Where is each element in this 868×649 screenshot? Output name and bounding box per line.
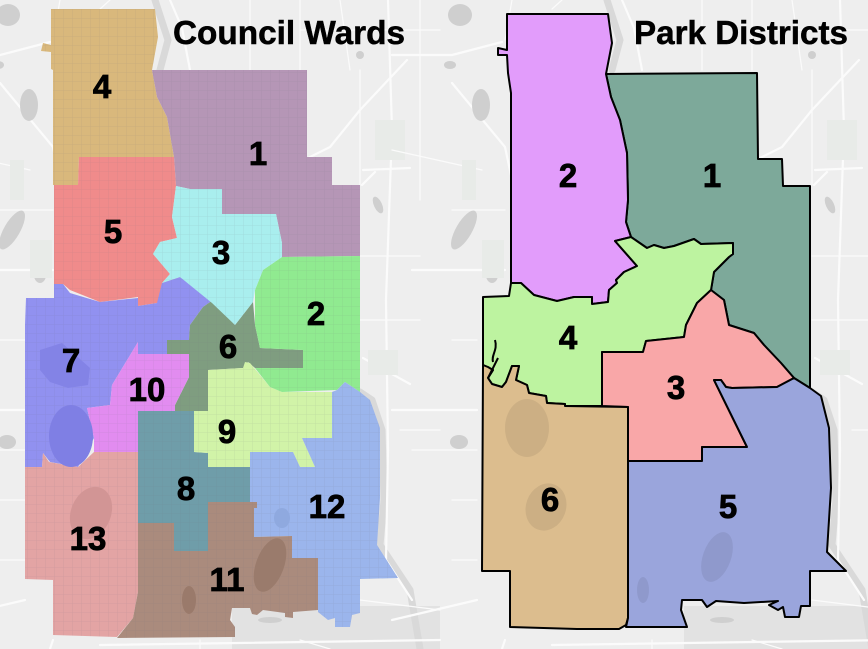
panel: council wards map: [25, 9, 398, 638]
ward label 13: 13: [70, 520, 106, 557]
ward 9: [194, 362, 332, 467]
park district numbers: [541, 157, 737, 525]
district label 5: 5: [719, 488, 737, 525]
ward label 4: 4: [93, 68, 112, 105]
lakes in districts: [505, 399, 739, 603]
ward numbers: [62, 68, 345, 598]
ward 2: [255, 256, 360, 392]
ward 12: [250, 382, 398, 627]
ward label 5: 5: [104, 213, 122, 250]
park district 4: [483, 237, 733, 406]
ward label 10: 10: [129, 371, 165, 408]
ward 4: [41, 9, 174, 185]
park district 2: [498, 14, 637, 304]
ward 5: [54, 157, 180, 306]
ward 13: [25, 452, 138, 637]
ward label 11: 11: [210, 561, 244, 598]
lakes in wards: [40, 343, 293, 614]
ward 11: [117, 502, 318, 638]
district label 3: 3: [667, 369, 685, 406]
street grid overlay: [25, 9, 397, 636]
ward label 1: 1: [249, 135, 267, 172]
ward 1: [152, 70, 360, 257]
district label 2: 2: [559, 157, 577, 194]
ward 7: [25, 277, 213, 467]
park district 1: [606, 73, 810, 388]
district label 4: 4: [559, 319, 578, 356]
ward 8: [138, 411, 250, 551]
park district 5: [626, 378, 846, 627]
ward label 2: 2: [307, 295, 325, 332]
ward 6: [167, 300, 303, 411]
title: park districts: Park Districts: [634, 14, 848, 51]
ward label 3: 3: [212, 234, 230, 271]
ward label 7: 7: [62, 342, 80, 379]
ward label 12: 12: [309, 488, 345, 525]
district label 6: 6: [541, 481, 559, 518]
district label 1: 1: [703, 157, 721, 194]
ward 3: [153, 186, 282, 325]
ward label 8: 8: [177, 470, 195, 507]
park district 3: [602, 290, 794, 461]
river in district 4: [488, 340, 498, 378]
ward label 9: 9: [218, 413, 236, 450]
title: council wards: Council Wards: [173, 14, 405, 51]
ward label 6: 6: [219, 328, 237, 365]
ward 10: [87, 342, 189, 452]
park district 6: [482, 365, 628, 629]
panel: park districts map: [482, 14, 846, 629]
